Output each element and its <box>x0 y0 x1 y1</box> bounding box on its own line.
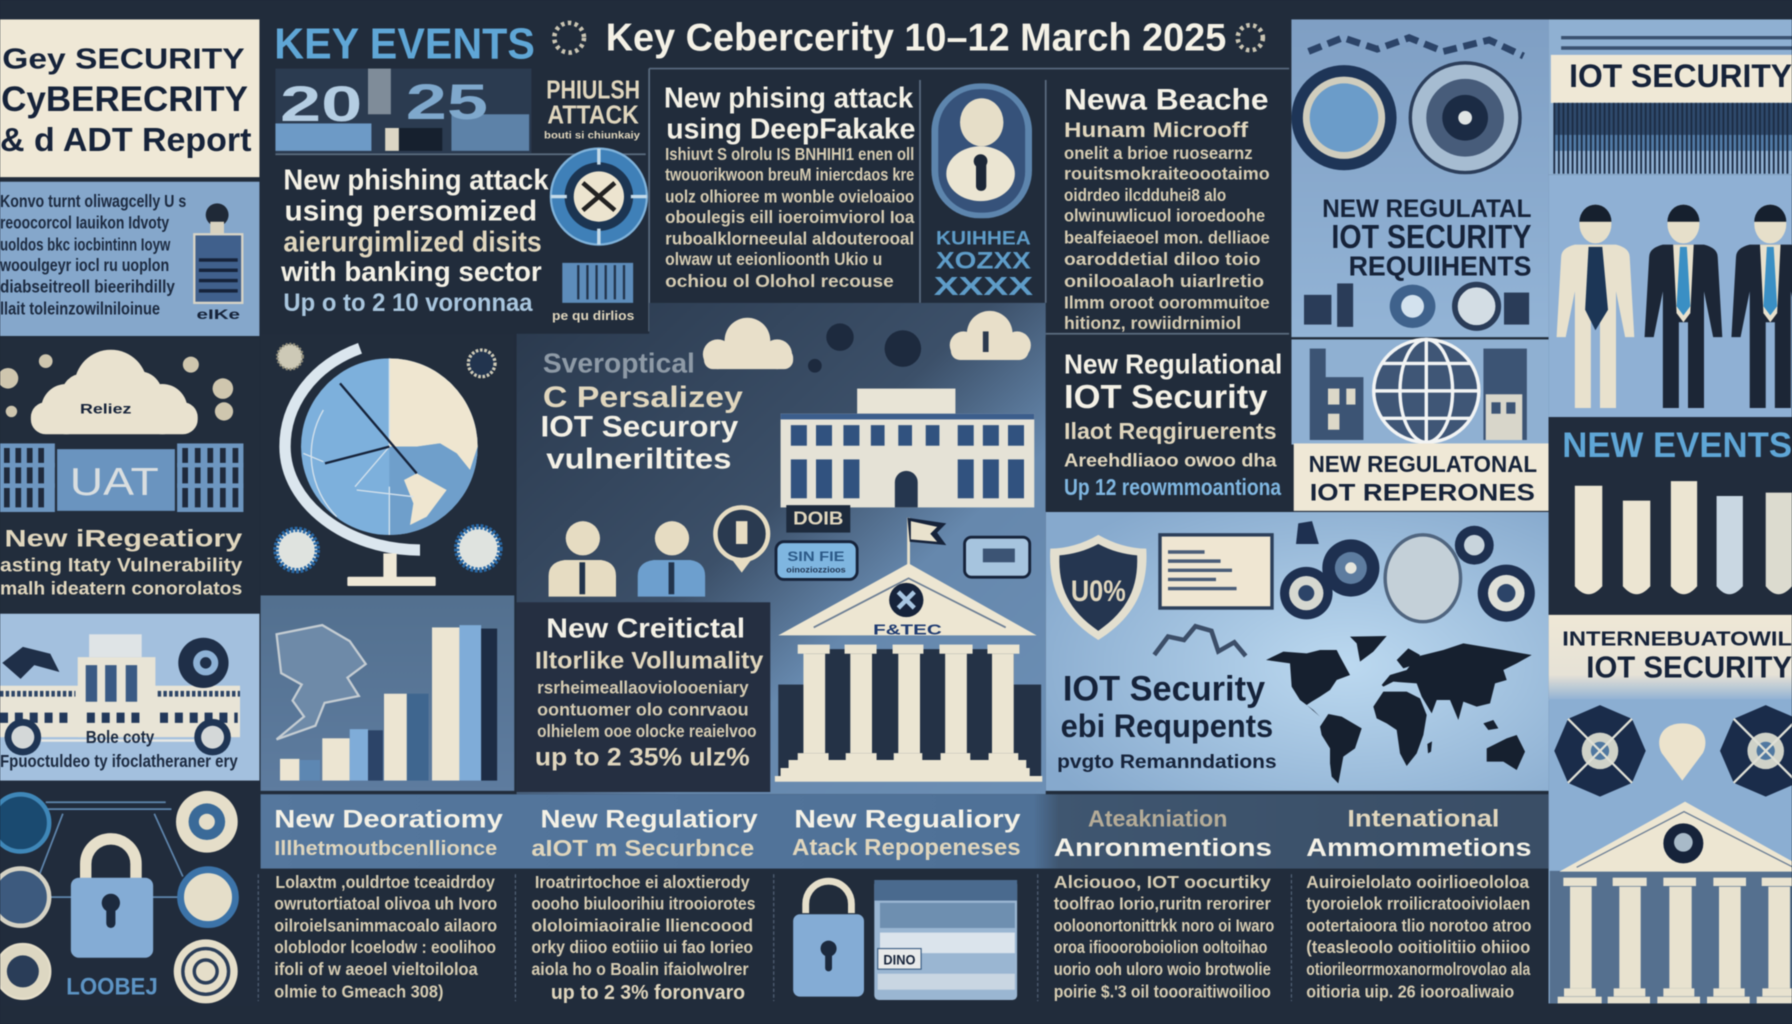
text column 4: poirie $.'3 oil toooraitiwoilioo <box>1054 982 1271 1002</box>
icon: globe with stand <box>285 348 478 586</box>
text: phish attack label: PHIULSH <box>546 74 640 104</box>
panel: requirements and world map: pvgto Remanndations <box>1057 751 1277 773</box>
icon: small blue server <box>552 263 634 323</box>
panel: IoT security requirements text: New Regulational <box>1064 349 1282 380</box>
icon: stacked screen list <box>874 880 1017 1000</box>
main title: Key Cebercerity 10–12 March 2025 <box>606 16 1226 59</box>
icon: screen monitor right <box>965 537 1030 577</box>
icon: small screen: SIN FIE <box>787 549 845 564</box>
icon: large campus building <box>781 389 1034 507</box>
panel: IoT security requirements text <box>1046 337 1291 511</box>
bars <box>1575 481 1792 594</box>
bars <box>280 625 497 781</box>
text block: news breach: olwinuwlicuol ioroedoohe <box>1064 206 1265 226</box>
panel: lock and circles <box>0 782 259 1006</box>
panel: building and vehicles <box>0 614 259 781</box>
header: column 3: New Regualiory <box>794 805 1021 833</box>
label: DOIB: DOIB <box>793 508 843 529</box>
label: DOIB <box>786 505 850 533</box>
text column 2: ololoimiaoiralie lliencoood <box>531 915 753 935</box>
icon: shield <box>1050 535 1147 640</box>
panel: cloud and UAT <box>0 338 259 613</box>
text column 4: Alciouoo, IOT oocurtiky <box>1054 872 1271 892</box>
panel: cloud and UAT: malh ideatern conorolatos <box>0 577 242 598</box>
text column 4: uorio ooh uloro woio brotwolie <box>1054 959 1271 979</box>
icon: small glyph circles <box>0 354 233 421</box>
text column 4: toolfrao Iorio,ruritn rerorirer <box>1054 894 1271 914</box>
panel: emblems and bank right <box>1549 699 1792 1003</box>
UAT label: UAT <box>70 461 159 504</box>
text: phish attack label <box>544 74 640 141</box>
panel: 2025 graphic: 25 <box>406 73 488 130</box>
header: column 5: Intenational <box>1347 805 1499 832</box>
text block: phishing attack: with banking sector <box>280 256 542 287</box>
icon: device: eIKe <box>197 307 241 322</box>
icon: star emblem left <box>1554 705 1646 797</box>
text block: news breach: onilooalaoh uiarlretio <box>1064 271 1264 291</box>
panel: globe <box>261 334 514 594</box>
UAT label <box>57 449 175 511</box>
panel: building and vehicles: Bole coty <box>86 727 155 747</box>
panel: requirements and world map: IOT Security <box>1063 669 1265 709</box>
text block: news breach: hitionz, rowiidrnimiol <box>1064 313 1241 333</box>
text: phish attack label: ATTACK <box>547 99 639 129</box>
text block: phishing attack: New phishing attack <box>283 165 549 197</box>
text column 2: Iroatrirtochoe ei aloxtierody <box>535 872 750 892</box>
panel: report title: Gey SECURITY <box>2 44 245 76</box>
panel: IoT security requirements text: IOT Security <box>1064 379 1268 416</box>
icon: small screen: oinoziozzioos <box>786 566 846 575</box>
text column 1 <box>274 872 497 1002</box>
text column 5: tyoroielok rroilicratooiviolaen <box>1306 894 1530 914</box>
icon: small device row <box>1304 283 1529 328</box>
panel: summary text and device <box>0 182 259 336</box>
panel: new events: NEW EVENTS <box>1562 425 1792 465</box>
panel: new critical vulnerability: Iltorlike Vollumality <box>535 648 764 675</box>
icon: concentric lens <box>1410 63 1520 173</box>
panel: cloud and UAT: asting Itaty Vulnerability <box>0 554 242 576</box>
text block: news breach <box>1064 84 1270 333</box>
header: column 4: Anronmentions <box>1054 834 1272 862</box>
text column 5: otiorileorrmoxanormolrovolao ala <box>1306 959 1531 979</box>
icon: person in dark suit <box>1645 205 1722 408</box>
text: masked account <box>934 228 1034 301</box>
panel: regulatory responses banner: IOT REPERONES <box>1310 480 1535 507</box>
header: column 1: New Deoratiomy <box>274 805 503 833</box>
text column 2: aiola ho o Boalin ifaiolwolrer <box>531 959 749 979</box>
panel: new critical vulnerability: rsrheimeallaoviolooeniary <box>537 678 749 698</box>
text column 1: Lolaxtm ,ouldrtoe tceaidrdoy <box>275 872 495 892</box>
icon: right buildings <box>1483 349 1527 440</box>
text: phish attack label: bouti si chiunkaiy <box>544 130 640 141</box>
small figures <box>1154 626 1246 656</box>
icon: wheel right <box>194 719 231 755</box>
icon: document card <box>1160 535 1272 608</box>
icon: barcode stripes <box>1554 103 1792 174</box>
panel: cloud and UAT: Reliez <box>80 402 132 417</box>
text block: news breach: Newa Beache <box>1064 84 1269 117</box>
icon: target badge <box>551 149 647 245</box>
text: critical IoT vulnerabilities <box>541 348 743 476</box>
icon: cloud <box>31 350 198 434</box>
panel: requirements and world map <box>1046 512 1549 791</box>
text block: deepfake phishing: using DeepFakake <box>666 113 915 145</box>
panel: new events <box>1549 417 1792 614</box>
text column 5 <box>1306 872 1531 1002</box>
panel: IoT top banner <box>1549 19 1792 175</box>
panel: globe and city <box>1291 339 1549 445</box>
icon: central bank: F&TEC <box>873 622 942 638</box>
panel: summary text and device: reoocorcol Iauikon Idvoty <box>0 213 170 233</box>
text block: news breach: oidrdeo ilcdduhei8 alo <box>1064 185 1226 205</box>
icon: person at right edge <box>1731 205 1792 408</box>
icon: cloud left <box>703 318 793 369</box>
panel: report title <box>0 19 259 177</box>
panel: requirements and world map: ebi Requpents <box>1061 708 1273 744</box>
text block: news breach: Hunam Microoff <box>1064 117 1249 142</box>
header: column 5: Ammommetions <box>1306 834 1531 862</box>
panel: new critical vulnerability: oontuomer olo conrvaou <box>537 699 749 719</box>
panel: IoT regulation top right: NEW REGULATAL <box>1322 195 1531 223</box>
icon: orbit badges <box>276 344 500 571</box>
sketch map <box>277 625 366 739</box>
panel: international IoT security: INTERNEBUATOWIL <box>1562 628 1792 651</box>
text block: phishing attack <box>280 165 549 317</box>
text column 5: Auiroielolato ooirlioeololoa <box>1306 872 1530 892</box>
text block: phishing attack: Up o to 2 10 voronnaa <box>283 289 534 317</box>
panel: 2025 graphic <box>275 69 531 153</box>
text block: deepfake phishing: oboulegis eill ioeroimviorol Ioa <box>665 207 915 227</box>
text: critical IoT vulnerabilities: Sveroptical <box>543 348 695 379</box>
icon: circle badges <box>0 791 238 1003</box>
text column 2: orky diioo eotiiio ui fao Iorieo <box>531 937 753 957</box>
panel: IoT regulation top right: REQUIIHENTS <box>1349 250 1531 281</box>
panel: IoT security requirements text: Ilaot Reqgiruerents <box>1064 418 1277 444</box>
panel: regulatory responses banner <box>1294 443 1549 511</box>
icon: round seal <box>1291 65 1397 170</box>
text column 2 <box>531 872 755 1004</box>
text block: deepfake phishing: New phising attack <box>664 82 913 114</box>
icon: small blue server: pe qu dirlios <box>552 309 634 323</box>
text block: deepfake phishing: ochiou ol Olohol recouse <box>665 271 894 291</box>
text: critical IoT vulnerabilities: vulneriltites <box>546 444 731 476</box>
text column 1: oilroielsanimmacoalo ailaoro <box>274 915 497 935</box>
panel: summary text and device: wooulgeyr iocl ru uoplon <box>0 255 169 275</box>
panel: people <box>1549 175 1792 417</box>
icon: stacked screen list: DINO <box>883 953 916 968</box>
icon: person in light suit <box>1557 205 1634 408</box>
header: column 2: aIOT m Securbnce <box>531 835 754 861</box>
icon: small screen <box>776 542 857 579</box>
icon: left buildings <box>1310 349 1363 440</box>
panel: lock and circles: LOOBEJ <box>66 973 158 1000</box>
icon: drop emblem <box>1659 723 1705 781</box>
icon: user lock portrait <box>931 83 1032 218</box>
panel: IoT security requirements text: Up 12 reowmmoantiona <box>1064 474 1281 500</box>
header: column 2 <box>531 805 758 861</box>
icon: gear cluster <box>1280 521 1535 622</box>
icon: right building <box>177 443 243 512</box>
header: column 4: Ateakniation <box>1088 805 1227 831</box>
text block: deepfake phishing: olwaw ut eeionlioonth Ukio u <box>665 249 882 269</box>
icon: blue padlock <box>793 881 864 997</box>
icon: world map <box>1266 636 1532 783</box>
panel: new critical vulnerability: New Creitictal <box>546 613 745 644</box>
panel: IoT regulation top right: IOT SECURITY <box>1331 219 1531 256</box>
text column 1: olmie to Gmeach 308) <box>274 982 443 1002</box>
icon: star emblem right <box>1720 705 1792 797</box>
panel: new critical vulnerability <box>517 602 770 792</box>
text block: deepfake phishing: uolz olhioree m wonble ovieloaioo <box>665 186 914 206</box>
icon: device <box>194 203 242 322</box>
icon: two business people <box>549 521 705 597</box>
text column 2: oooho biuloorihiu itrooiorotes <box>531 894 755 914</box>
text column 5: oitioria uip. 26 iooroaliwaio <box>1306 982 1514 1002</box>
text column 2: up to 2 3% foronvaro <box>551 981 745 1004</box>
panel: summary text and device: llait toleinzowilniloinue <box>0 298 160 318</box>
text: masked account: XXXX <box>934 271 1034 301</box>
text column 5: ootertaioora tlio norotoo atroo <box>1306 915 1531 935</box>
text: masked account: KUIHHEA <box>936 228 1031 250</box>
icon: campus building <box>0 634 240 737</box>
text block: news breach: onelit a brioe ruosearnz <box>1064 143 1253 163</box>
text column 4 <box>1054 872 1274 1002</box>
text column 1: ifoli of w aeoel vieltoiloloa <box>274 959 478 979</box>
header: column 1: Illhetmoutbcenllionce <box>274 837 497 860</box>
text block: deepfake phishing: Ishiuvt S olrolu IS BNHIHI1 enen oll <box>665 144 914 164</box>
icon: left building <box>0 443 55 512</box>
panel: bar chart <box>261 595 514 791</box>
icon: header emblem right <box>1238 25 1263 50</box>
table header band <box>261 794 1549 869</box>
panel: IoT security requirements text: Areehdliaoo owoo dha <box>1064 449 1277 470</box>
icon: dark cam shapes <box>808 323 937 400</box>
text block: phishing attack: aierurgimlized disits <box>283 226 542 258</box>
text column 1: oloblodor lcoelodw : eoolihoo <box>274 937 496 957</box>
header: column 3 <box>792 805 1021 860</box>
text: critical IoT vulnerabilities: C Persalizey <box>543 381 743 414</box>
panel: report title: & d ADT Report <box>0 122 251 159</box>
icon: speech badge <box>715 507 768 573</box>
icon: central bank <box>775 518 1042 782</box>
header: column 5 <box>1306 805 1531 862</box>
panel: summary text and device: uoldos bkc iocbintinn Ioyw <box>0 234 171 254</box>
text column 4: oroa ifioooroboiolion ooltoihao <box>1054 937 1267 957</box>
heading: key events: KEY EVENTS <box>274 20 535 68</box>
panel: new critical vulnerability: olhielem ooe olocke reaielvoo <box>537 721 757 741</box>
panel: summary text and device: Konvo turnt oliwagcelly U s <box>0 191 186 211</box>
panel: summary text and device: diabseitreoll bieerihdilly <box>0 277 175 297</box>
header: column 3: Atack Repopeneses <box>792 834 1021 860</box>
panel: cloud and UAT: New iRegeatiory <box>5 525 243 552</box>
icon: header emblem left <box>554 23 584 53</box>
panel: report title: CyBERECRITY <box>1 79 248 119</box>
text column 4: ooloonortonittrkk noro oi Iwaro <box>1054 915 1274 935</box>
text: critical IoT vulnerabilities: IOT Securory <box>541 411 739 444</box>
text block: news breach: rouitsmokraiteoootaimo <box>1064 163 1270 183</box>
icon: wire globe <box>1374 339 1479 442</box>
icon: shield: U0% <box>1071 575 1126 608</box>
text block: news breach: bealfeiaeoel mon. delliaoe <box>1064 227 1270 247</box>
text column 1: owrutortiatoal olivoa uh Ivoro <box>274 894 497 914</box>
text block: news breach: oaroddetial diloo toio <box>1064 249 1261 269</box>
icon: cloud right <box>950 311 1031 360</box>
panel: central slate <box>517 303 1046 794</box>
icon: padlock <box>71 839 153 958</box>
panel: building and vehicles: Fpuoctuldeo ty ifoclatheraner ery <box>0 751 238 771</box>
text block: phishing attack: using persomized <box>285 196 537 228</box>
text block: deepfake phishing: twouorikwoon breuM iniercdaos kre <box>665 165 914 185</box>
icon: wheel left <box>5 719 41 755</box>
icon: bank right <box>1558 802 1792 1003</box>
panel: IoT regulation top right <box>1291 19 1549 337</box>
header: column 2: New Regulatiory <box>541 805 758 833</box>
icon: dark eye emblem <box>2 638 229 688</box>
text: masked account: XOZXX <box>936 248 1031 275</box>
text block: deepfake phishing: ruboalklorneeulal aldouterooal <box>665 229 914 249</box>
header: column 4 <box>1054 805 1272 862</box>
panel: international IoT security <box>1549 615 1792 701</box>
text block: deepfake phishing <box>664 82 915 291</box>
header: column 1 <box>274 805 503 860</box>
panel: new critical vulnerability: up to 2 35% ulz% <box>535 744 750 772</box>
text column 5: (teasleoolo ooitiolitiio ohiioo <box>1306 937 1530 957</box>
text block: news breach: Ilmm oroot oorommuitoe <box>1064 293 1270 313</box>
panel: regulatory responses banner: NEW REGULATONAL <box>1309 451 1537 477</box>
panel: 2025 graphic: 20 <box>280 75 362 132</box>
panel: IoT top banner: IOT SECURITY <box>1569 58 1792 94</box>
